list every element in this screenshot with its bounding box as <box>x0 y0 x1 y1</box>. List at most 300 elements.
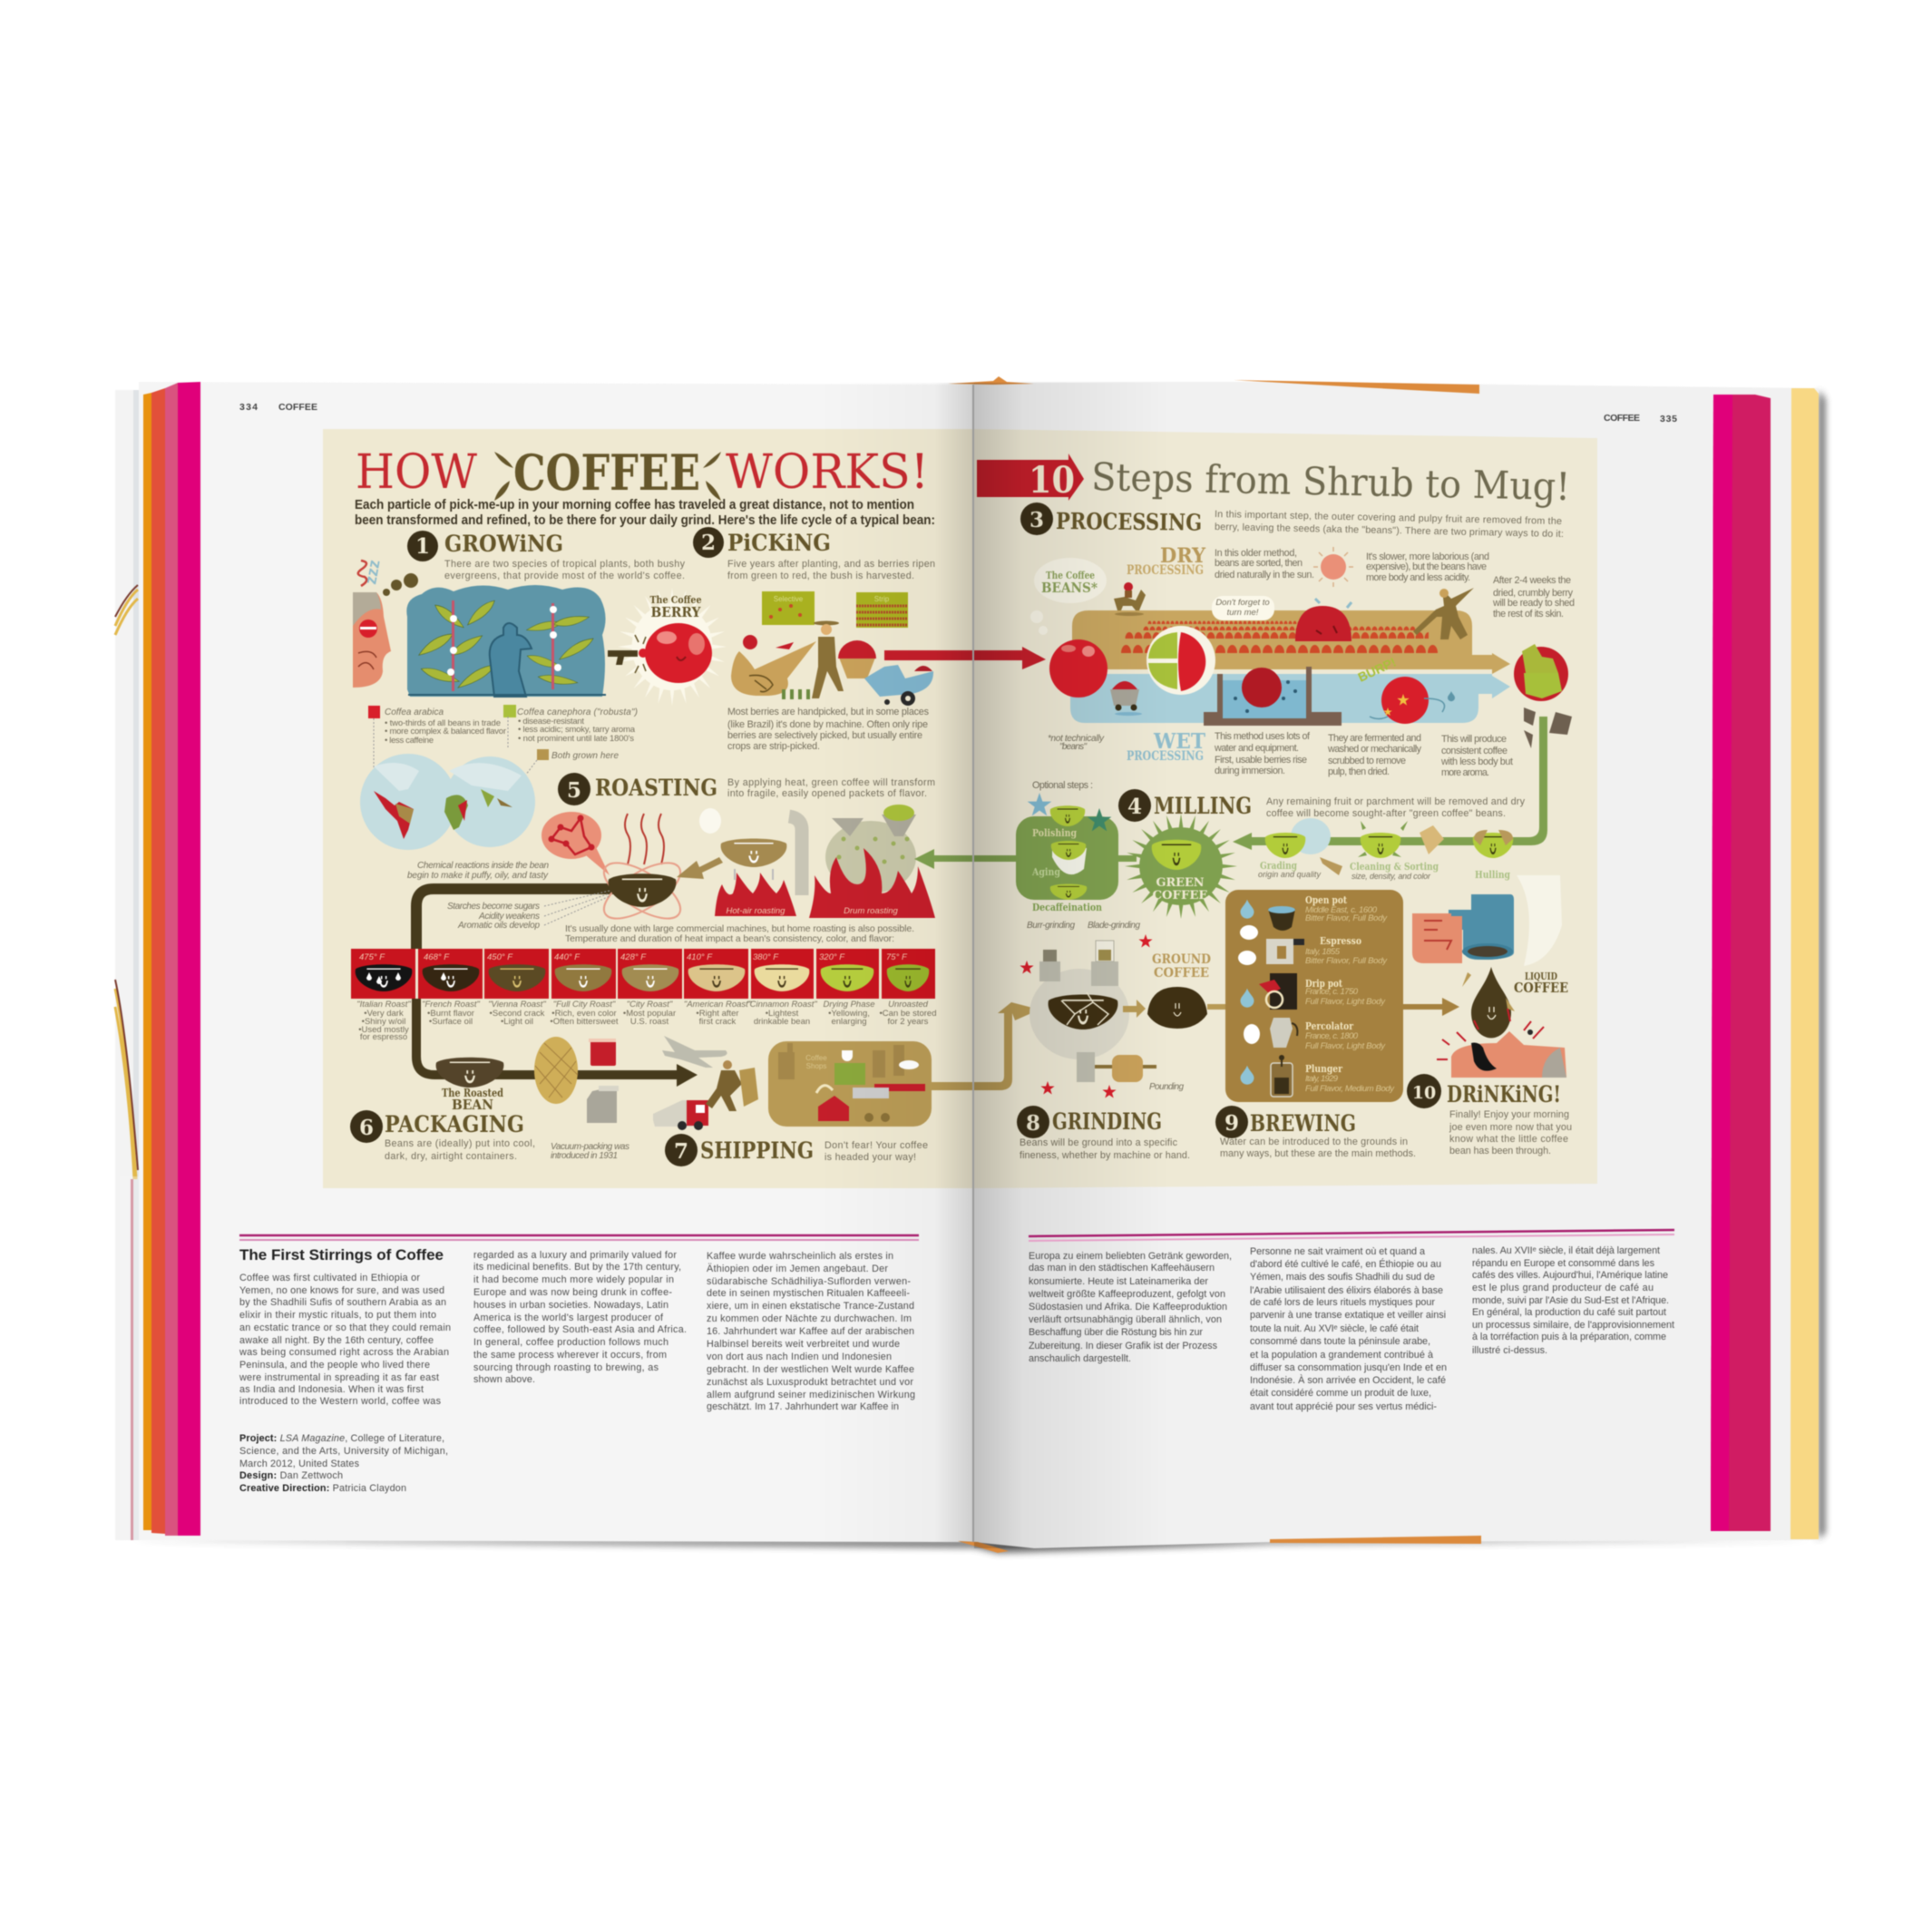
folio right: COFFEE <box>1604 413 1640 424</box>
credits: Project: LSA Magazine, College of Literature, <box>239 1433 444 1444</box>
illustration: hot-air roasting <box>699 808 802 916</box>
dry processing label and text: expensive), but the beans have <box>1366 561 1487 572</box>
article column 5 (French): était considéré comme un produit de luxe, <box>1250 1388 1431 1399</box>
step 2: picking heading and text: 2 <box>701 531 716 555</box>
wet processing label and text: pulp, then dried. <box>1328 766 1390 777</box>
article column 3: allem aufgrund seiner medizinischen Wirkung <box>707 1390 915 1400</box>
step 3: processing heading and text: berry, leaving the seeds (aka the "beans"). There are two primary ways to do it: <box>1215 522 1564 540</box>
chart: roast colour scale: first crack <box>699 1017 737 1027</box>
wet processing label and text: *not technically <box>1048 734 1105 744</box>
illustration: grinding: Blade-grinding <box>1088 921 1140 931</box>
legend: coffee species: Coffea arabica <box>385 707 444 717</box>
article column 2: it had become much more widely popular in <box>473 1274 674 1285</box>
step 6: packaging heading and text <box>350 1110 629 1162</box>
folio right: 335 <box>1660 414 1677 424</box>
illustration: molecule bubble <box>542 812 610 875</box>
illustration: hot-air roasting: Hot-air roasting <box>727 906 785 916</box>
right page <box>974 382 1819 1548</box>
wet processing label and text: WET <box>1153 729 1205 754</box>
roasting notes: Acidity weakens <box>478 912 540 922</box>
illustration: coffee plants and botanist <box>406 585 606 697</box>
article column 1: Yemen, no one knows for sure, and was used <box>239 1285 444 1296</box>
article column 1: introduced to the Western world, coffee was <box>239 1396 442 1407</box>
speech bubble: don't forget: turn me! <box>1227 608 1259 618</box>
article column 1: as India and Indonesia. When it was first <box>239 1384 424 1395</box>
step 8: grinding heading and text: 8 <box>1026 1111 1040 1136</box>
book cover and page edges, left <box>115 390 143 1540</box>
intro text: Each particle of pick-me-up in your morning coffee has traveled a great distance, not to mention <box>355 497 914 512</box>
article column 5 (French): Indonésie. À son arrivée en Occident, le café <box>1250 1374 1446 1386</box>
chart: roast colour scale: •Often bittersweet <box>550 1017 619 1027</box>
open pot: Middle East, c. 1600 <box>1305 905 1378 915</box>
green arrow to roasting <box>914 849 1016 869</box>
article column 3: südarabische Schädhiliya-Suflorden verwen- <box>707 1276 911 1287</box>
wet processing label and text: PROCESSING <box>1127 749 1204 764</box>
chart: roast colour scale: 320° F <box>819 952 845 962</box>
step 9: brewing heading and text: BREWING <box>1250 1110 1356 1137</box>
step 2: picking heading and text <box>693 527 935 581</box>
folio left <box>239 402 317 413</box>
article heading: The First Stirrings of Coffee <box>239 1247 444 1264</box>
illustration: mug pouring <box>1412 875 1562 966</box>
chart: roast colour scale: drinkable bean <box>754 1017 810 1027</box>
step 5: roasting heading and text <box>558 773 935 805</box>
chart: roast colour scale: 410° F <box>687 952 713 962</box>
illustration: selective and strip picking: Strip <box>874 595 890 603</box>
icons: packaging sack, can and bag <box>534 1037 619 1123</box>
optional steps box <box>1016 780 1118 913</box>
open pot: Open pot <box>1305 894 1348 906</box>
dry processing label and text: After 2-4 weeks the <box>1493 575 1571 586</box>
title: How Coffee Works: COFFEE <box>513 444 700 502</box>
intro text <box>355 497 935 528</box>
icon: horse rider <box>1114 582 1146 616</box>
step 5: roasting heading and text: into fragile, easily opened packets of flavor. <box>727 788 927 799</box>
dry processing label and text: In this older method, <box>1215 548 1297 559</box>
picking paragraph: berries are selectively picked, but usually entire <box>727 730 922 741</box>
banner: 10 arrow: 10 <box>1029 459 1075 502</box>
roasting notes: Chemical reactions inside the bean <box>417 861 549 871</box>
illustration: plane, truck and delivery man <box>653 1036 758 1130</box>
wet processing label and text: more aroma. <box>1441 767 1489 778</box>
dry processing label and text: beans are sorted, then <box>1215 558 1303 569</box>
chart: roast colour scale <box>351 949 937 1042</box>
espresso: Espresso <box>1320 935 1361 947</box>
article column 2: Europe and was now being drunk in coffee- <box>473 1287 672 1298</box>
arrow from brewing to liquid coffee <box>1403 998 1459 1016</box>
legend: coffee species <box>368 705 638 798</box>
roasting notes: Aromatic oils develop <box>457 921 540 931</box>
article column 3: geschätzt. Im 17. Jahrhundert war Kaffee in <box>707 1401 899 1412</box>
illustration: drum roasting <box>809 805 935 918</box>
article column 4 (German): Südostasien und Afrika. Die Kaffeeproduktion <box>1029 1302 1227 1312</box>
milling stages: origin and quality <box>1258 870 1321 879</box>
wet processing label and text: water and equipment. <box>1214 743 1299 754</box>
chart: roast colour scale: •Surface oil <box>429 1017 473 1027</box>
orange cover edges <box>948 376 1481 1553</box>
step 3: processing heading and text: PROCESSING <box>1056 508 1202 536</box>
step 8: grinding heading and text: GRINDING <box>1052 1108 1162 1135</box>
plunger: Full Flavor, Medium Body <box>1305 1084 1395 1094</box>
step 6: packaging heading and text: 6 <box>359 1116 374 1140</box>
article column 2: regarded as a luxury and primarily valued for <box>473 1250 677 1261</box>
step 9: brewing heading and text: 9 <box>1225 1111 1239 1136</box>
wet processing label and text: "beans" <box>1059 742 1087 752</box>
article column 4 (German) <box>1028 1251 1232 1364</box>
article column 6 (French): répandu en Europe et consommé dans les <box>1472 1258 1655 1269</box>
illustration: the roasted bean: BEAN <box>452 1097 493 1113</box>
wet processing label and text: consistent coffee <box>1441 746 1508 756</box>
coloured page tabs, right <box>1711 388 1819 1539</box>
dark arrow from chart to shipping <box>416 999 698 1087</box>
step 9: brewing heading and text <box>1215 1106 1416 1159</box>
chart: roast colour scale: •Can be stored <box>879 1009 937 1019</box>
plunger <box>1241 1055 1395 1097</box>
step 1: growing heading and text: There are two species of tropical plants, both bushy <box>444 559 686 570</box>
wet processing label and text: during immersion. <box>1215 766 1285 776</box>
illustration: grinding: Pounding <box>1149 1082 1184 1092</box>
intro text: been transformed and refined, to be there for your daily grind. Here's the life cycle of a typical bean: <box>355 512 935 528</box>
illustration: berry bursting open <box>1514 644 1572 748</box>
title: How Coffee Works <box>356 444 929 502</box>
title: How Coffee Works: HOW <box>356 445 478 500</box>
folio left: COFFEE <box>278 402 317 413</box>
article column 2: the same process wherever it occurs, from <box>473 1350 667 1361</box>
article column 3: zunächst als Luxusprodukt betrachtet und vor <box>707 1377 913 1388</box>
step 6: packaging heading and text: PACKAGING <box>385 1111 524 1137</box>
article column 5 (French): Personne ne sait vraiment où et quand a <box>1250 1246 1425 1257</box>
article column 1 <box>239 1273 451 1407</box>
step 10: drinking heading and text: 10 <box>1412 1083 1436 1103</box>
roasting notes <box>407 861 914 944</box>
article column 4 (German): das man in den städtischen Kaffeehäusern <box>1029 1263 1215 1273</box>
milling stages: size, density, and color <box>1351 872 1431 881</box>
illustration: drinker's face <box>1437 1009 1566 1078</box>
percolator: France, c. 1800 <box>1305 1031 1359 1041</box>
chart: roast colour scale: "Full City Roast" <box>553 1000 616 1010</box>
step 1: growing heading and text: 1 <box>415 534 430 559</box>
banner: 10 arrow <box>977 454 1084 502</box>
article column 4 (German): weltweit größte Kaffeeproduzent, gefolgt von <box>1028 1289 1225 1300</box>
chart: roast colour scale: Unroasted <box>888 1000 929 1010</box>
drip pot: France, c. 1750 <box>1305 987 1359 997</box>
article column 2: houses in urban societies. Nowadays, Latin <box>473 1300 668 1311</box>
legend: coffee species: Both grown here <box>551 751 619 761</box>
coloured page tabs, left <box>143 382 200 1536</box>
illustration: grinding: Burr-grinding <box>1027 921 1075 931</box>
step 2: picking heading and text: from green to red, the bush is harvested. <box>727 571 914 581</box>
illustration: liquid coffee drop: LIQUID <box>1525 971 1557 982</box>
brewing methods panel <box>1225 890 1403 1102</box>
step 7: shipping heading and text: is headed your way! <box>825 1152 916 1163</box>
chart: roast colour scale: •Rich, even color <box>551 1009 617 1019</box>
chart: roast colour scale: for 2 years <box>888 1017 929 1027</box>
illustration: grinding <box>1020 921 1184 1098</box>
open pot: Bitter Flavor, Full Body <box>1305 913 1388 923</box>
article column 3: von dort aus nach Indien und Indonesien <box>707 1351 892 1362</box>
wet processing label and text: This method uses lots of <box>1215 731 1311 742</box>
article column 4 (German): Zubereitung. In dieser Grafik ist der Prozess <box>1029 1341 1218 1351</box>
credits: Science, and the Arts, University of Michigan, <box>239 1446 448 1457</box>
plunger: Plunger <box>1305 1063 1342 1075</box>
optional steps box: Aging <box>1031 866 1060 878</box>
chart: roast colour scale: "Vienna Roast" <box>488 1000 546 1010</box>
step 5: roasting heading and text: 5 <box>567 778 581 803</box>
legend: coffee species: • more complex & balanced flavor <box>385 727 506 737</box>
step 10: drinking heading and text: joe even more now that you <box>1449 1122 1572 1133</box>
chart: roast colour scale: 75° F <box>886 952 908 962</box>
chart: roast colour scale: 468° F <box>424 952 450 962</box>
percolator <box>1244 1018 1386 1051</box>
chart: roast colour scale: •Burnt flavor <box>427 1009 474 1019</box>
the coffee beans label <box>1030 558 1107 635</box>
chart: roast colour scale: •Used mostly <box>358 1025 409 1035</box>
article column 1: were instrumental in spreading it as far east <box>239 1372 439 1383</box>
illustration: fermenting berry, burp: BURP! <box>1356 654 1398 685</box>
article column 1: awake all night. By the 16th century, coffee <box>239 1335 434 1346</box>
illustration: ground coffee: GROUND <box>1152 952 1211 967</box>
step 6: packaging heading and text: dark, dry, airtight containers. <box>385 1151 517 1162</box>
article column 3: zu kommen oder Nächte zu durchwachen. Im <box>707 1313 912 1324</box>
step 10: drinking heading and text: know what the little coffee <box>1449 1134 1568 1145</box>
illustration: green coffee star <box>1125 814 1237 919</box>
dry processing label and text <box>1127 544 1575 620</box>
illustration: liquid coffee drop <box>1462 967 1568 1038</box>
article column 5 (French): avant tout apprécié pour ses vertus médici- <box>1250 1401 1437 1412</box>
illustration: ground coffee: COFFEE <box>1154 966 1209 981</box>
espresso <box>1238 925 1388 966</box>
red arrow to processing <box>884 647 1046 669</box>
left page <box>120 382 974 1542</box>
step 7: shipping heading and text <box>665 1134 928 1166</box>
step 2: picking heading and text: PiCKiNG <box>727 530 831 556</box>
chart: roast colour scale: Drying Phase <box>823 1000 875 1010</box>
chart: roast colour scale: •Yellowing, <box>828 1009 870 1019</box>
title: How Coffee Works: WORKS! <box>726 445 929 500</box>
chart: roast colour scale: for espresso <box>360 1032 407 1042</box>
step 7: shipping heading and text: Don't fear! Your coffee <box>825 1140 928 1151</box>
magenta rule, right <box>1029 1230 1674 1241</box>
wet processing label and text: washed or mechanically <box>1327 744 1422 755</box>
magenta rule, left <box>239 1235 919 1240</box>
dry processing label and text: more body and less acidity. <box>1366 572 1470 583</box>
legend: coffee species: • two-thirds of all beans in trade <box>385 718 501 728</box>
article column 1: by the Shadhili Sufis of southern Arabia as an <box>239 1297 446 1308</box>
illustration: fermenting berry, burp <box>1356 654 1455 724</box>
milling stages: Grading <box>1260 860 1297 872</box>
wet processing label and text: This will produce <box>1441 734 1507 745</box>
illustration: selective and strip picking: Selective <box>774 595 804 603</box>
article column 1: Peninsula, and the people who lived there <box>239 1360 430 1371</box>
green band to green coffee <box>1118 855 1137 862</box>
credits: March 2012, United States <box>239 1459 360 1469</box>
chart: roast colour scale: 440° F <box>554 952 581 962</box>
picking paragraph: crops are strip-picked. <box>727 741 820 752</box>
illustration: liquid coffee drop: COFFEE <box>1514 980 1568 996</box>
step 4: milling heading and text: coffee will become sought-after "green coffee" beans. <box>1266 808 1506 819</box>
roasting notes: Temperature and duration of heat impact a bean's consistency, color, and flavor: <box>565 933 894 944</box>
step 5: roasting heading and text: ROASTING <box>595 775 717 801</box>
credits: Design: Dan Zettwoch <box>239 1470 343 1481</box>
step 10: drinking heading and text: Finally! Enjoy your morning <box>1449 1109 1569 1120</box>
chart: roast colour scale: "American Roast" <box>684 1000 752 1010</box>
dry processing label and text: dried naturally in the sun. <box>1215 570 1314 581</box>
chart: roast colour scale: enlarging <box>831 1017 867 1027</box>
chart: roast colour scale: "Cinnamon Roast" <box>746 1000 817 1010</box>
article column 5 (French): de café lors de leurs rituels mystiques pour <box>1250 1297 1435 1308</box>
article column 6 (French): En général, la production du café suit partout <box>1472 1307 1666 1318</box>
chart: roast colour scale: 475° F <box>359 952 385 962</box>
article column 3 <box>707 1251 915 1412</box>
step 1: growing heading and text: GROWiNG <box>444 531 563 557</box>
folio left: 334 <box>239 402 258 413</box>
step 6: packaging heading and text: Vacuum-packing was <box>551 1142 629 1152</box>
article column 4 (German): anschaulich dargestellt. <box>1029 1353 1131 1364</box>
illustration: the coffee berry burst: BERRY <box>651 604 701 620</box>
legend: coffee species: Coffea canephora ("robusta") <box>517 707 638 717</box>
percolator: Percolator <box>1305 1020 1353 1032</box>
article column 3: Äthiopien oder im Jemen angebaut. Der <box>707 1264 888 1274</box>
chart: roast colour scale: •Light oil <box>501 1017 533 1027</box>
article column 6 (French): illustré ci-dessus. <box>1472 1345 1547 1356</box>
illustration: the coffee berry burst <box>608 588 727 706</box>
article column 3: Kaffee wurde wahrscheinlich als erstes in <box>707 1251 893 1262</box>
article column 4 (German): verläuft ortsunabhängig überall ähnlich, von <box>1029 1314 1222 1325</box>
percolator: Full Flavor, Light Body <box>1305 1041 1386 1051</box>
optional steps box: Polishing <box>1032 827 1077 839</box>
step 10: drinking heading and text: bean has been through. <box>1449 1146 1551 1156</box>
roasting notes: begin to make it puffy, oily, and tasty <box>407 871 549 881</box>
brown arrow to bean <box>677 857 723 879</box>
article column 2: In general, coffee production follows much <box>473 1337 668 1348</box>
step 4: milling heading and text: 4 <box>1127 795 1142 819</box>
article column 3: gebracht. In der westlichen Welt wurde Kaffee <box>707 1364 914 1375</box>
optional steps box: Optional steps : <box>1032 780 1093 791</box>
article column 6 (French): est le plus grand producteur de café au <box>1472 1283 1654 1293</box>
article column 5 (French): Yémen, mais des soufis Shadhili du sud de <box>1250 1272 1435 1283</box>
speech bubble: don't forget: Don't forget to <box>1215 598 1270 608</box>
icon: dreaming farmer head: zzz <box>361 559 384 586</box>
article column 5 (French): toute la nuit. Au XVIᵉ siècle, le café était <box>1250 1323 1419 1334</box>
chart: roast colour scale: •Lightest <box>766 1009 799 1019</box>
picking paragraph <box>727 707 930 752</box>
article column 6 (French): nales. Au XVIIᵉ siècle, il était déjà largement <box>1472 1245 1660 1256</box>
article column 2: coffee, followed by South-east Asia and Africa. <box>473 1324 687 1335</box>
open pot <box>1241 894 1388 931</box>
article column 5 (French): parvenir à une transe extatique et veiller ainsi <box>1250 1310 1446 1321</box>
wet processing label and text <box>1048 729 1513 778</box>
illustration: bean in atom orbit <box>596 853 688 929</box>
step 4: milling heading and text: Any remaining fruit or parchment will be removed and dry <box>1266 796 1526 807</box>
article column 4 (German): konsumierte. Heute ist Lateinamerika der <box>1029 1276 1208 1287</box>
article column 5 (French): diffuser sa consommation jusqu'en Inde et en <box>1250 1362 1447 1373</box>
illustration: coffee town: Shops <box>806 1062 826 1070</box>
article column 2: sourcing through roasting to brewing, as <box>473 1362 659 1373</box>
chart: roast colour scale: •Very dark <box>364 1009 404 1019</box>
drip pot: Drip pot <box>1305 978 1343 990</box>
chart: roast colour scale: 450° F <box>487 952 513 962</box>
icon: sun <box>1313 547 1353 587</box>
article column 1: an ecstatic trance or so that they could remain <box>239 1322 451 1333</box>
article column 5 (French) <box>1250 1246 1447 1412</box>
illustration: the roasted bean <box>436 1058 503 1113</box>
step 1: growing heading and text: evergreens, that provide most of the world's coffee. <box>444 571 685 581</box>
chart: roast colour scale: •Most popular <box>623 1009 676 1019</box>
legend: coffee species: • less caffeine <box>385 736 434 746</box>
article column 6 (French): cafés des villes. Aujourd'hui, l'Amérique latine <box>1472 1270 1668 1281</box>
optional steps box: Decaffeination <box>1032 902 1102 913</box>
step 4: milling heading and text <box>1118 789 1526 822</box>
article column 1: Coffee was first cultivated in Ethiopia or <box>239 1273 420 1283</box>
step 6: packaging heading and text: Beans are (ideally) put into cool, <box>385 1138 535 1149</box>
illustration: the coffee berry burst: The Coffee <box>649 594 702 606</box>
article column 6 (French): un processus similaire, de l'approvisionnement <box>1472 1320 1674 1331</box>
icon: dreaming farmer head <box>353 559 418 688</box>
page gutter shading <box>816 383 1170 1548</box>
article column 6 (French) <box>1472 1245 1674 1356</box>
article column 1: elixir in their mystic rituals, to put them into <box>239 1310 436 1321</box>
chart: roast colour scale: U.S. roast <box>630 1017 668 1027</box>
dry processing label and text: It's slower, more laborious (and <box>1366 551 1489 562</box>
article column 5 (French): d'abord été cultivé le café, en Éthiopie ou au <box>1250 1258 1441 1270</box>
legend: coffee species: • less acidic; smoky, tarry aroma <box>518 725 636 735</box>
legend: coffee species: • disease-resistant <box>518 717 584 727</box>
step 1: growing heading and text <box>407 531 686 581</box>
credits <box>239 1433 448 1494</box>
article column 3: xiere, um in einen ekstatische Trance-Zustand <box>707 1301 914 1312</box>
dry processing label and text: the rest of its skin. <box>1493 609 1564 620</box>
infographic background panels <box>323 429 1597 1188</box>
espresso: Bitter Flavor, Full Body <box>1305 956 1388 966</box>
chart: roast colour scale: 428° F <box>620 952 647 962</box>
icon: cart of berries <box>1110 681 1142 716</box>
dry and wet process belts <box>1070 599 1510 723</box>
milling stages <box>1258 818 1513 881</box>
step 10: drinking heading and text: DRiNKiNG! <box>1447 1081 1561 1107</box>
picking paragraph: (like Brazil) it's done by machine. Often only ripe <box>727 719 928 730</box>
article column 5 (French): et la population a grandement contribué à <box>1250 1350 1433 1361</box>
step 9: brewing heading and text: Water can be introduced to the grounds in <box>1220 1137 1408 1147</box>
step 9: brewing heading and text: many ways, but these are the main methods. <box>1220 1148 1416 1159</box>
step 3: processing heading and text: In this important step, the outer covering and pulpy fruit are removed from the <box>1215 509 1562 527</box>
article column 3: dete in seinen mystischen Ritualen Kaffeeeli- <box>707 1288 910 1299</box>
article column 2 <box>473 1250 687 1385</box>
article column 2: shown above. <box>473 1374 535 1385</box>
illustration: the roasted bean: The Roasted <box>442 1087 503 1099</box>
dry processing label and text: dried, crumbly berry <box>1493 588 1574 599</box>
article column 2: its medicinal benefits. But by the 17th century, <box>473 1262 681 1273</box>
step 8: grinding heading and text: Beans will be ground into a specific <box>1020 1137 1178 1148</box>
credits: Creative Direction: Patricia Claydon <box>239 1483 406 1494</box>
dark path from roast bean around colour chart <box>416 889 617 949</box>
green pipe from processing to milling <box>1233 717 1547 850</box>
book shadow <box>127 390 1825 1553</box>
folio right <box>1604 413 1677 424</box>
article column 1: was being consumed right across the Arabian <box>239 1347 449 1358</box>
chart: roast colour scale: "City Roast" <box>627 1000 673 1010</box>
milling stages: Cleaning & Sorting <box>1350 861 1439 873</box>
illustration: coffee berry <box>1049 639 1107 698</box>
wet processing label and text: with less body but <box>1440 756 1513 767</box>
the coffee beans label: The Coffee <box>1046 570 1095 581</box>
illustration: green coffee star: GREEN <box>1156 876 1205 890</box>
chart: roast colour scale: •Right after <box>696 1009 739 1019</box>
illustration: coffee town: Coffee <box>805 1054 827 1062</box>
drip pot: Full Flavor, Light Body <box>1305 997 1386 1007</box>
article column 5 (French): consommé dans toute la péninsule arabe, <box>1250 1336 1430 1347</box>
chart: roast colour scale: "Italian Roast" <box>356 1000 411 1010</box>
dry processing label and text: will be ready to shed <box>1492 598 1575 609</box>
